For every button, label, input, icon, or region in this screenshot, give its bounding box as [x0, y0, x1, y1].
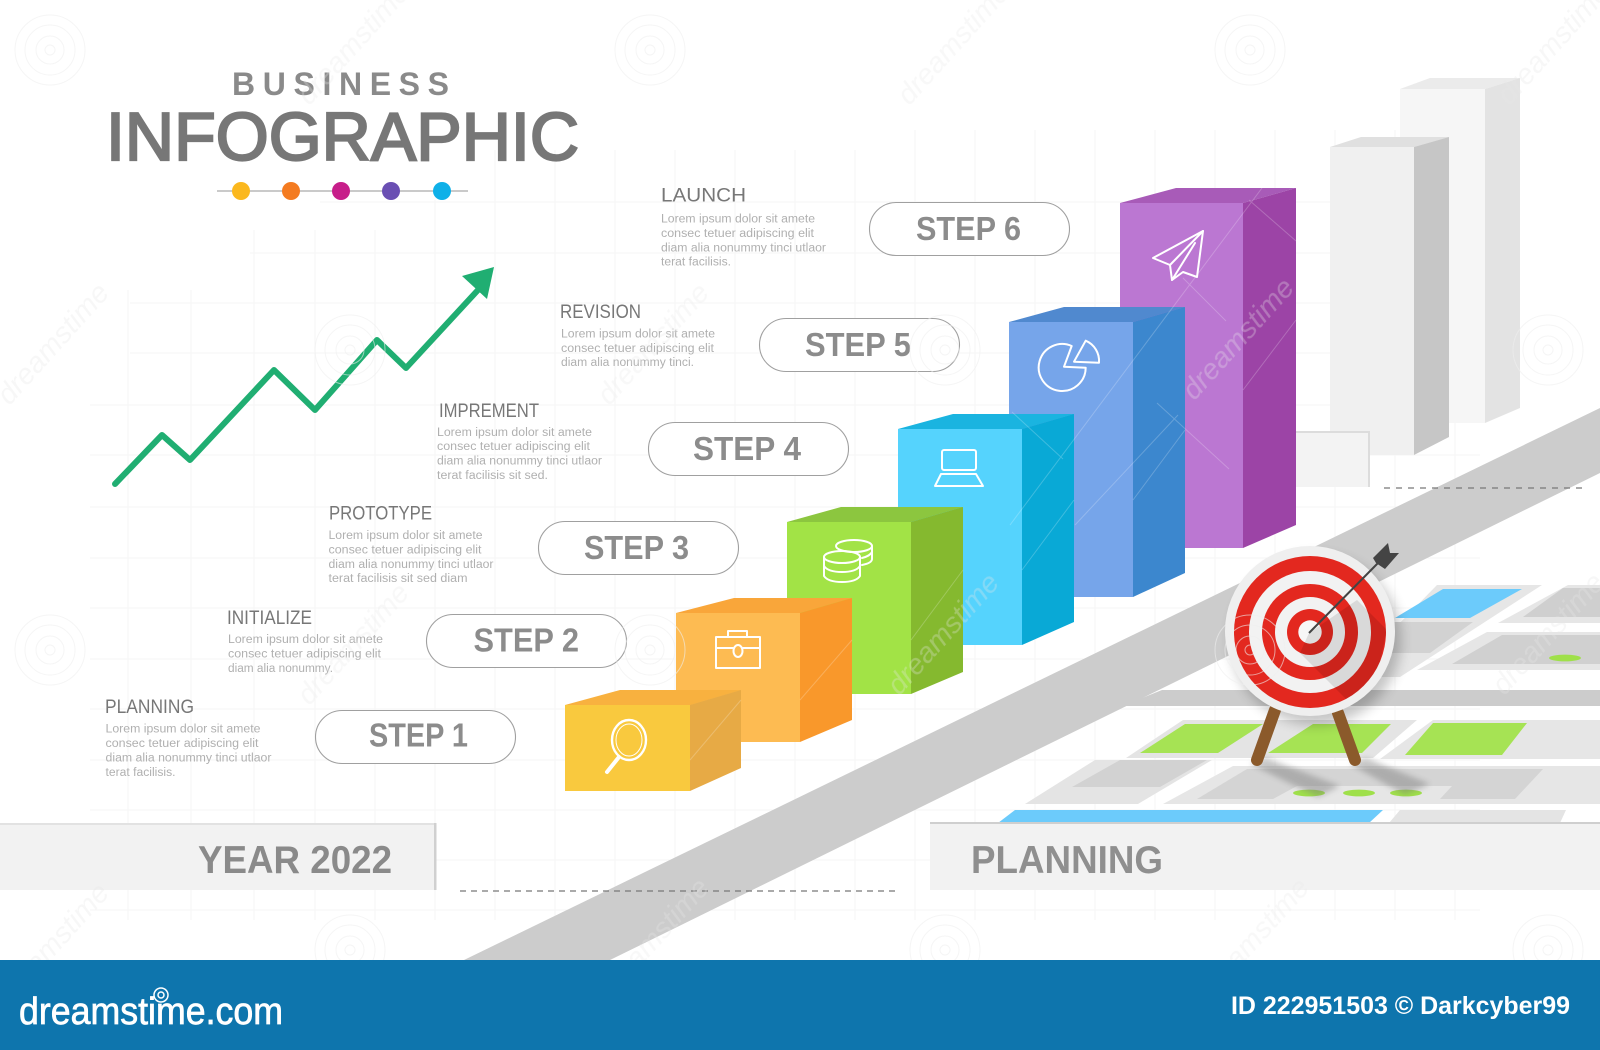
text block: launch: consec tetuer adipiscing elit	[661, 228, 815, 240]
text block: launch	[661, 184, 826, 268]
footer bar	[0, 960, 1600, 1050]
title dots	[217, 182, 468, 200]
text block: planning: diam alia nonummy tinci utlaor	[106, 752, 272, 764]
watermark text: dreamstime	[591, 872, 716, 1006]
title: INFOGRAPHIC	[106, 99, 579, 175]
text block: imprement: consec tetuer adipiscing elit	[437, 441, 591, 453]
icon: magnifier	[607, 720, 646, 772]
background block: small grey box	[1290, 432, 1369, 487]
text block: prototype: Lorem ipsum dolor sit amete	[328, 530, 482, 542]
bar: step 2 orange	[676, 598, 852, 742]
dashed line: lower middle	[460, 890, 899, 892]
dashed line: upper right	[1384, 487, 1583, 489]
text block: planning: PLANNING	[105, 696, 194, 718]
text block: initialize	[227, 607, 383, 675]
map: city blocks	[998, 585, 1600, 823]
panel: year 2022: YEAR 2022	[198, 839, 392, 882]
text block: prototype: diam alia nonummy tinci utlaor	[328, 559, 494, 571]
pill: step 2	[426, 614, 626, 668]
background bar: far grey	[1400, 78, 1520, 423]
watermark text: dreamstime	[291, 577, 416, 711]
arrow: green rising line	[115, 267, 494, 484]
text block: planning: terat facilisis.	[106, 767, 176, 779]
icon: paper plane	[1153, 231, 1203, 280]
text block: initialize: Lorem ipsum dolor sit amete	[228, 634, 383, 646]
footer logo text: dreamstime.com	[19, 991, 283, 1033]
bar: step 1 yellow	[565, 690, 741, 791]
text block: revision: diam alia nonummy tinci.	[561, 357, 694, 369]
pill: step 6: STEP 6	[916, 210, 1021, 247]
panel: planning	[930, 822, 1600, 890]
text block: imprement: Lorem ipsum dolor sit amete	[437, 427, 592, 439]
pill: step 3	[538, 522, 738, 574]
text block: planning	[105, 696, 272, 779]
bar: step 5 blue	[1009, 307, 1185, 597]
footer image id: ID 222951503 © Darkcyber99	[1231, 992, 1570, 1020]
text block: revision: REVISION	[560, 301, 641, 323]
text block: imprement: IMPREMENT	[439, 400, 539, 422]
background bar: near grey	[1330, 137, 1449, 455]
pill: step 6	[870, 202, 1070, 256]
pill: step 4: STEP 4	[693, 430, 802, 467]
watermark text: dreamstime	[1191, 872, 1316, 1006]
title	[106, 66, 579, 175]
text block: launch: terat facilisis.	[661, 256, 731, 268]
pill: step 1: STEP 1	[369, 716, 468, 754]
text block: prototype: PROTOTYPE	[329, 502, 432, 524]
pill: step 3: STEP 3	[584, 529, 689, 566]
text block: launch: Lorem ipsum dolor sit amete	[661, 214, 815, 226]
text block: imprement: terat facilisis sit sed.	[437, 470, 548, 482]
text block: prototype	[328, 502, 494, 585]
pill: step 5	[760, 318, 960, 372]
text block: planning: consec tetuer adipiscing elit	[106, 738, 259, 750]
text block: prototype: terat facilisis sit sed diam	[328, 573, 468, 585]
watermark text: dreamstime	[881, 567, 1006, 701]
target with arrow	[1225, 543, 1430, 797]
bar: step 6 purple	[1120, 188, 1296, 548]
text block: revision	[560, 301, 715, 369]
icon: pie chart	[1039, 341, 1099, 391]
icon: coins	[824, 540, 872, 582]
text block: launch: diam alia nonummy tinci utlaor	[661, 242, 826, 254]
text block: prototype: consec tetuer adipiscing elit	[328, 544, 482, 556]
watermark text: dreamstime	[591, 277, 716, 411]
text block: initialize: diam alia nonummy.	[228, 663, 333, 675]
pill: step 5: STEP 5	[805, 326, 911, 363]
text block: planning: Lorem ipsum dolor sit amete	[106, 724, 260, 736]
bar: step 3 green	[787, 507, 963, 694]
watermark text: dreamstime	[1176, 272, 1301, 406]
text block: initialize: consec tetuer adipiscing elit	[228, 648, 382, 660]
icon: laptop	[935, 450, 983, 486]
target legs	[1257, 710, 1355, 760]
pill: step 1	[316, 710, 516, 764]
icon: briefcase	[716, 631, 760, 668]
text block: launch: LAUNCH	[661, 184, 746, 206]
text block: imprement: diam alia nonummy tinci utlaor	[437, 456, 602, 468]
text block: revision: consec tetuer adipiscing elit	[561, 343, 715, 355]
panel: year 2022	[0, 823, 436, 890]
icon: footer spiral	[154, 988, 168, 1002]
text block: initialize: INITIALIZE	[227, 607, 312, 629]
diagonal road	[464, 408, 1600, 960]
panel: planning: PLANNING	[971, 839, 1163, 882]
bar: step 4 cyan	[898, 414, 1074, 645]
text block: revision: Lorem ipsum dolor sit amete	[561, 328, 715, 340]
pill: step 4	[648, 422, 848, 476]
pill: step 2: STEP 2	[474, 622, 579, 658]
text block: imprement	[437, 400, 602, 482]
title: BUSINESS	[232, 66, 449, 102]
